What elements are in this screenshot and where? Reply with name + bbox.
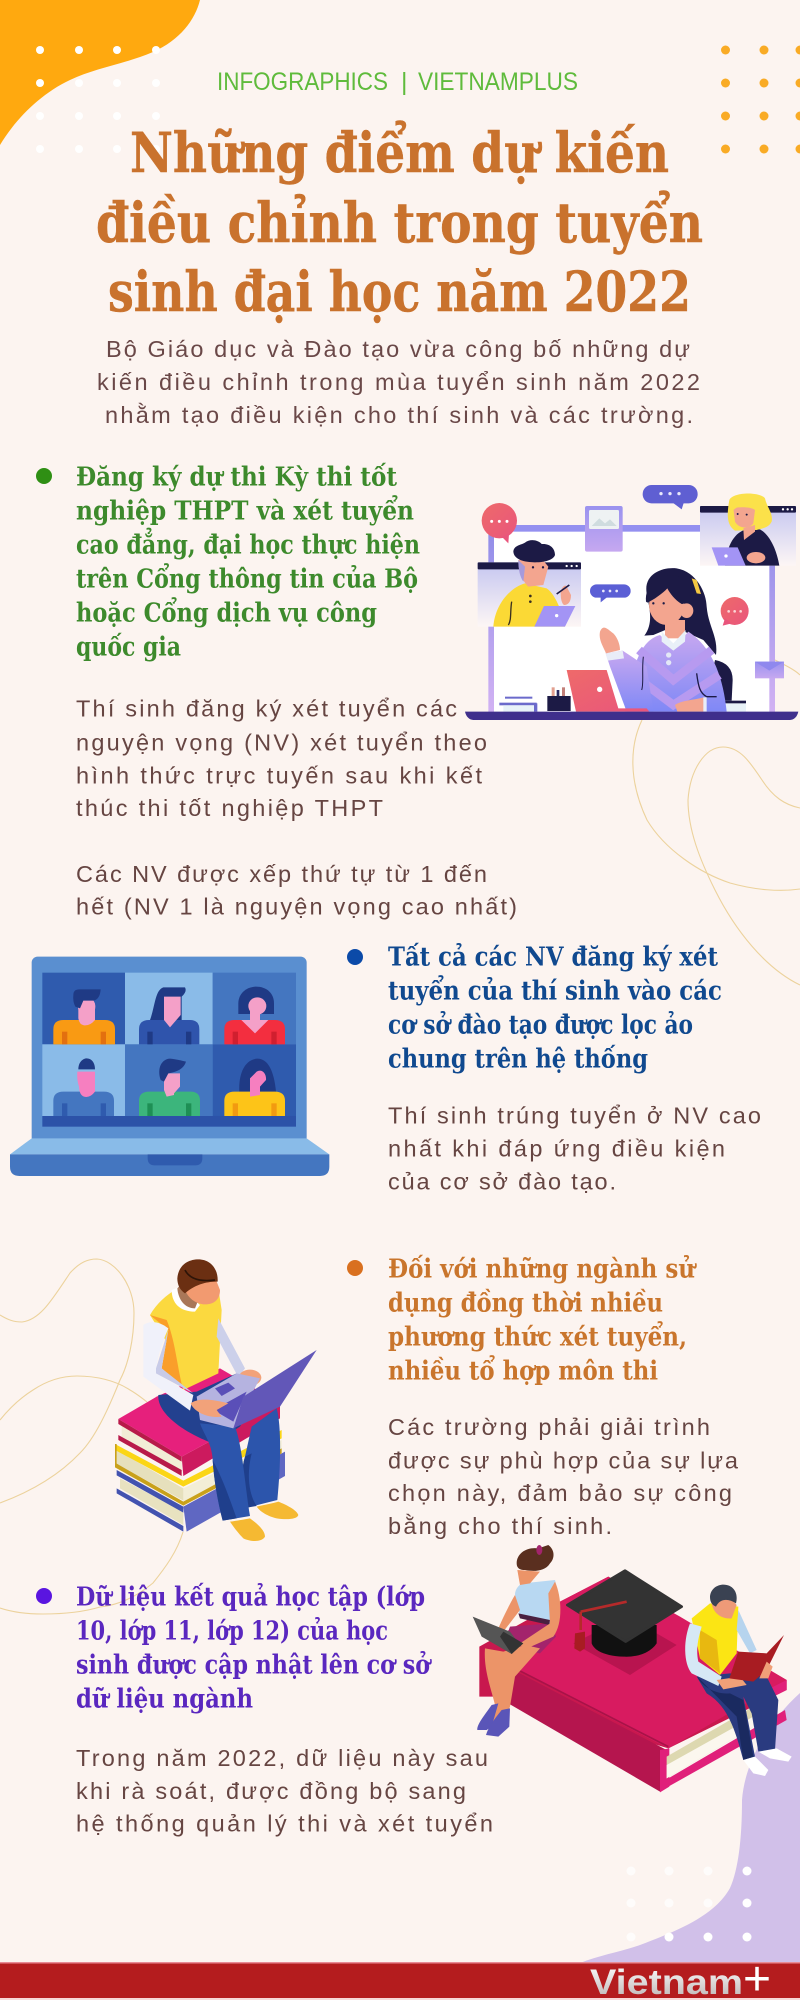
source label: INFOGRAPHICS	[217, 68, 388, 96]
body text: section 1: Thí sinh đăng ký xét tuyển các	[76, 696, 457, 722]
book: yellow	[115, 1430, 282, 1506]
person: grey blue shirt	[53, 1058, 114, 1116]
body text: section 3: bằng cho thí sinh.	[388, 1513, 612, 1539]
graduation cap	[567, 1571, 682, 1675]
title: Những điểm dự kiến	[130, 120, 669, 185]
heading: section 2	[388, 942, 722, 1075]
heading: section 1	[76, 462, 420, 663]
bullet: green	[36, 468, 52, 484]
panel: section 1 registration	[36, 462, 517, 920]
heading: section 1: hoặc Cổng dịch vụ công	[76, 597, 377, 629]
body text: section 1: hình thức trực tuyến sau khi kết	[76, 762, 482, 788]
video window: blonde woman	[700, 494, 796, 566]
heading: section 1: trên Cổng thông tin của Bộ	[76, 563, 418, 595]
heading: section 2: cơ sở đào tạo được lọc ảo	[388, 1011, 693, 1041]
body text: section 2: của cơ sở đào tạo.	[388, 1168, 616, 1194]
speech bubble: red left	[482, 503, 517, 543]
bullet: violet	[36, 1588, 52, 1604]
body text: section 1	[76, 696, 517, 920]
heading: section 4: 10, lớp 11, lớp 12) của học	[76, 1617, 388, 1647]
heading: section 3	[388, 1253, 697, 1386]
body text: section 1: thúc thi tốt nghiệp THPT	[76, 795, 383, 821]
intro paragraph: kiến điều chỉnh trong mùa tuyển sinh năm 2022	[97, 369, 700, 395]
giant book	[479, 1577, 787, 1792]
book: blue	[117, 1452, 285, 1532]
body text: section 1: hết (NV 1 là nguyện vọng cao nhất)	[76, 894, 517, 920]
body text: section 4: Trong năm 2022, dữ liệu này sau	[76, 1745, 488, 1771]
orange corner blob	[0, 0, 200, 145]
body text: section 1: Các NV được xếp thứ tự từ 1 đến	[76, 861, 487, 887]
video window: man	[478, 540, 581, 627]
body text: section 3	[388, 1414, 739, 1539]
body text: section 3: chọn này, đảm bảo sự công	[388, 1480, 732, 1506]
panel: section 4 academic data	[36, 1582, 493, 1837]
footer band	[0, 1953, 800, 2000]
body text: section 3: được sự phù hợp của sự lựa	[388, 1447, 739, 1473]
illustration: student on book stack	[115, 1259, 317, 1541]
title: sinh đại học năm 2022	[108, 259, 691, 324]
source label	[217, 68, 578, 96]
speech bubble: red right	[721, 597, 749, 626]
laptop: red	[567, 670, 649, 712]
footer logo: Vietnam+	[590, 1953, 771, 2000]
panel: section 2 virtual filtering	[347, 942, 761, 1194]
intro paragraph	[97, 336, 700, 428]
panel: section 3 multiple methods	[347, 1253, 739, 1539]
body text: section 4: hệ thống quản lý thi và xét tuyển	[76, 1811, 493, 1837]
body text: section 2: nhất khi đáp ứng điều kiện	[388, 1136, 725, 1162]
figure: student with laptop	[143, 1259, 317, 1541]
person: green shirt	[139, 1059, 200, 1116]
intro paragraph: Bộ Giáo dục và Đào tạo vừa công bố những dự	[106, 336, 690, 362]
heading: section 2: tuyển của thí sinh vào các	[388, 975, 722, 1007]
person: yellow shirt	[224, 1059, 285, 1116]
person: red shirt	[224, 987, 285, 1044]
title: điều chỉnh trong tuyển	[96, 190, 703, 255]
body text: section 3: Các trường phải giải trình	[388, 1414, 710, 1440]
speech bubble: blue middle	[590, 584, 631, 602]
lavender corner blob	[580, 1693, 800, 1963]
heading: section 3: dụng đồng thời nhiều	[388, 1288, 663, 1318]
orange dot grid	[721, 46, 800, 154]
bullet: blue	[347, 949, 363, 965]
bullet: orange	[347, 1260, 363, 1276]
body text: section 4	[76, 1745, 493, 1837]
source label: VIETNAMPLUS	[418, 68, 578, 96]
heading: section 4	[76, 1582, 432, 1715]
illustration: laptop video call grid	[10, 957, 329, 1176]
heading: section 4: Dữ liệu kết quả học tập (lớp	[76, 1582, 425, 1613]
heading: section 3: nhiều tổ hợp môn thi	[388, 1354, 658, 1386]
heading: section 2: Tất cả các NV đăng ký xét	[388, 942, 718, 973]
books on desk	[499, 697, 537, 712]
person: orange shirt	[53, 989, 115, 1044]
heading: section 1: quốc gia	[76, 632, 181, 663]
intro paragraph: nhằm tạo điều kiện cho thí sinh và các trường.	[105, 402, 693, 428]
illustration: online meeting teacher	[465, 485, 798, 720]
figure: girl with laptop	[473, 1545, 560, 1737]
figure: boy reading	[685, 1585, 792, 1776]
white dot grid	[36, 46, 160, 153]
desk bar	[465, 712, 798, 720]
body text: section 1: nguyện vọng (NV) xét tuyển theo	[76, 730, 487, 756]
title	[96, 120, 703, 324]
heading: section 4: dữ liệu ngành	[76, 1685, 253, 1715]
body text: section 4: khi rà soát, được đồng bộ sang	[76, 1778, 466, 1804]
icon: picture card	[585, 506, 623, 552]
figure: teacher at desk	[600, 568, 746, 712]
icon: envelope	[755, 662, 784, 678]
person: blue shirt	[139, 987, 199, 1044]
pencil cup	[547, 687, 571, 711]
speech bubble: blue top	[643, 485, 698, 509]
heading: section 1: nghiệp THPT và xét tuyển	[76, 495, 414, 527]
heading: section 1: Đăng ký dự thi Kỳ thi tốt	[76, 462, 397, 493]
heading: section 1: cao đẳng, đại học thực hiện	[76, 528, 420, 561]
source label: |	[401, 68, 408, 96]
body text: section 2	[388, 1102, 761, 1194]
pale dot grid	[626, 1866, 752, 1942]
illustration: students on giant book	[473, 1545, 792, 1792]
heading: section 2: chung trên hệ thống	[388, 1044, 648, 1075]
heading: section 4: sinh được cập nhật lên cơ sở	[76, 1651, 432, 1681]
book: pink	[118, 1368, 280, 1476]
body text: section 2: Thí sinh trúng tuyển ở NV cao	[388, 1102, 761, 1128]
heading: section 3: phương thức xét tuyển,	[388, 1320, 687, 1352]
heading: section 3: Đối với những ngành sử	[388, 1253, 697, 1284]
